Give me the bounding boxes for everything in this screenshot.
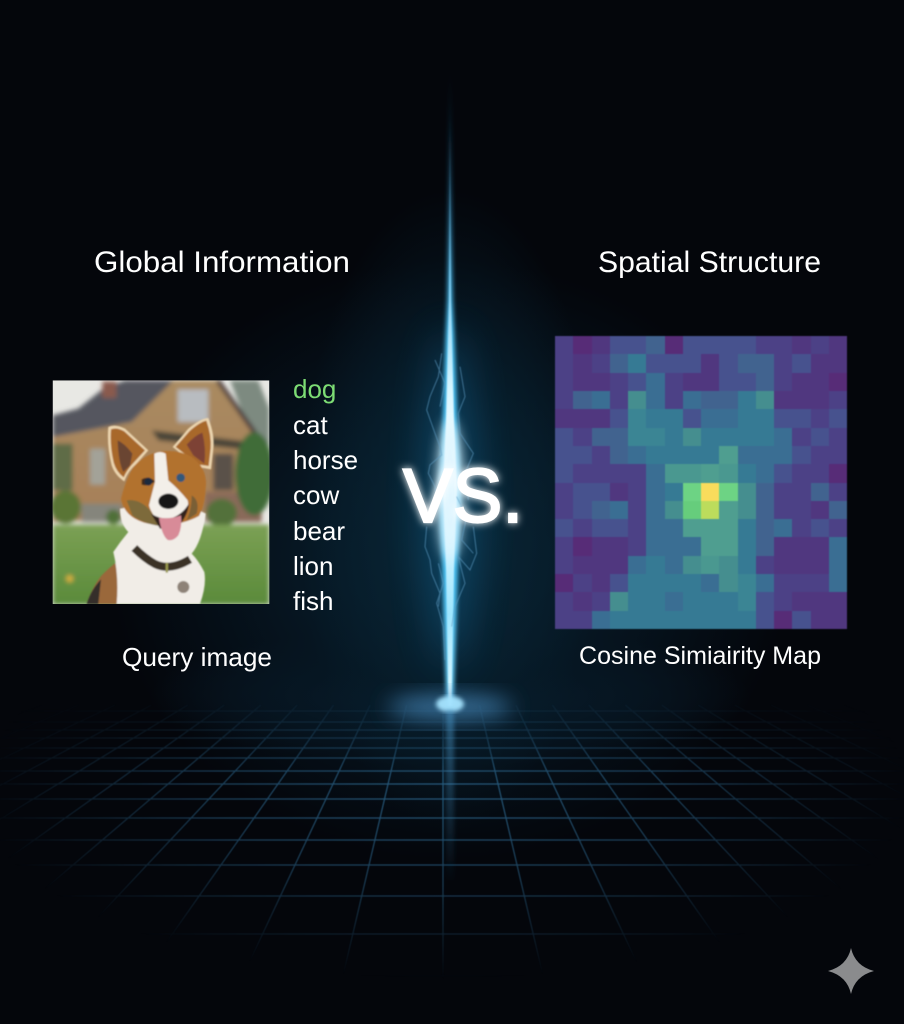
wide blue haze: [426, 330, 474, 670]
query image: dog in front of house: [52, 380, 270, 604]
label: horse: horse: [293, 445, 358, 475]
heading: Spatial Structure: Spatial Structure: [598, 246, 821, 279]
label: cat: cat: [293, 410, 328, 440]
label: dog: dog: [293, 374, 336, 404]
dog: [87, 418, 214, 604]
label: lion: lion: [293, 551, 333, 581]
beam core: [443, 100, 457, 706]
label: bear: bear: [293, 516, 345, 546]
VS. emblem: VS.: [403, 454, 523, 539]
perspective grid floor: [4, 706, 882, 964]
label: cow: cow: [293, 480, 339, 510]
beam glow: [439, 60, 461, 706]
heading: Global Information: Global Information: [94, 246, 350, 279]
caption: Cosine Simiairity Map: Cosine Simiairity Map: [579, 642, 821, 670]
lightning tendrils: [425, 353, 477, 660]
label: fish: fish: [293, 586, 333, 616]
cosine similarity heatmap: [554, 335, 848, 630]
central flash: [437, 420, 463, 560]
base flare: [388, 695, 512, 880]
blurred house and garden: [50, 380, 274, 605]
caption: Query image: Query image: [122, 642, 272, 672]
